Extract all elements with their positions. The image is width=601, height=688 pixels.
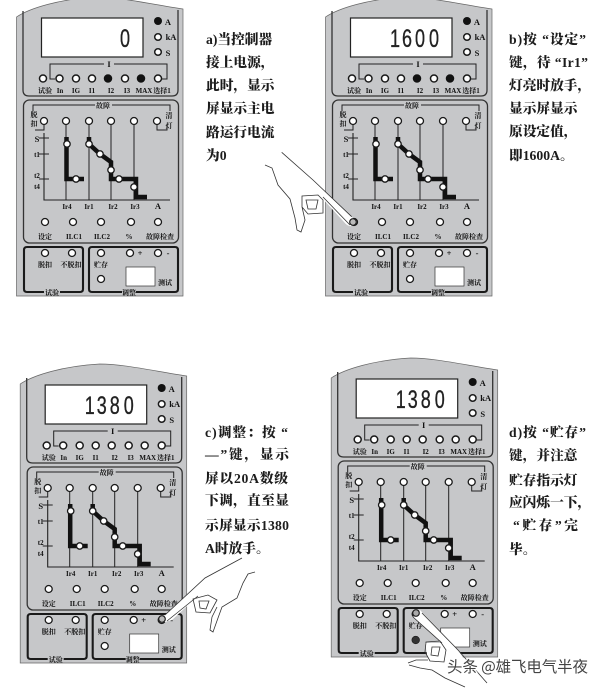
panel labels: A <box>155 201 162 211</box>
panel labels: I1 <box>404 448 410 456</box>
panel labels: 脱扣 <box>353 621 367 630</box>
panel labels: 脱 <box>345 471 352 480</box>
display reading 1600: 0 <box>429 24 439 53</box>
instruction a <box>206 31 276 163</box>
panel d: store setting <box>331 358 498 658</box>
panel labels: I1 <box>89 87 96 95</box>
display reading 1380: 0 <box>435 385 445 414</box>
panel labels: Ir3 <box>439 203 449 211</box>
icon: hand pressing minus key <box>159 558 255 632</box>
panel labels: 脱 <box>30 110 38 119</box>
indicator dots <box>413 74 454 82</box>
panel labels: - <box>167 248 170 258</box>
instruction d <box>509 424 591 557</box>
display reading 1380: 8 <box>110 391 120 420</box>
panel labels: Ir3 <box>445 564 455 572</box>
panel labels: ILC2 <box>403 233 419 241</box>
panel labels: In <box>57 87 63 95</box>
instruction d: “贮存”完 <box>513 517 578 533</box>
panel labels: Ir1 <box>88 570 98 578</box>
panel labels: 试验 <box>347 86 361 95</box>
panel labels: 试验 <box>45 288 59 297</box>
panel labels: ILC1 <box>381 594 397 602</box>
display reading 1380: 3 <box>408 385 418 414</box>
panel labels: t4 <box>38 550 44 558</box>
panel labels: Ir2 <box>423 564 433 572</box>
panel labels: + <box>447 248 452 258</box>
panel labels: I <box>111 426 115 436</box>
panel labels: Ir1 <box>84 203 94 211</box>
panel body <box>326 0 492 296</box>
panel labels: t2 <box>38 539 44 547</box>
instruction c: 下调，直至显 <box>205 492 289 510</box>
panel labels: Ir2 <box>112 570 122 578</box>
instruction b: 即1600A。 <box>509 148 574 163</box>
instruction c: A时放手。 <box>205 540 270 556</box>
panel labels: 调整 <box>126 655 140 664</box>
panel labels: 故障 <box>411 462 425 471</box>
panel labels: 选择1 <box>462 86 480 95</box>
panel labels: S <box>38 501 43 511</box>
panel labels: 清 <box>169 478 176 487</box>
panel labels: 扣 <box>30 119 38 128</box>
panel labels: 试验 <box>353 447 367 456</box>
panel labels: kA <box>169 399 181 409</box>
panel labels: t4 <box>349 544 355 552</box>
instruction c: —”键，显示 <box>204 446 290 464</box>
panel labels: S <box>475 48 480 58</box>
panel labels: % <box>129 600 136 608</box>
panel labels: A <box>165 17 172 27</box>
panel labels: 贮存 <box>94 260 108 269</box>
panel labels: + <box>452 609 457 619</box>
indicator dots <box>104 74 145 82</box>
panel labels: IG <box>381 87 390 95</box>
panel labels: IG <box>387 448 395 456</box>
panel labels: 清 <box>480 472 487 481</box>
panel labels: ILC1 <box>70 600 86 608</box>
panel labels: + <box>138 248 143 258</box>
panel a: controller powered on <box>16 0 183 297</box>
panel labels: 设定 <box>347 232 361 241</box>
panel labels: Ir4 <box>377 564 387 572</box>
panel b: press set key <box>326 0 492 297</box>
panel labels: A <box>159 568 166 578</box>
display reading 1380: 8 <box>421 385 431 414</box>
display reading 1380: 0 <box>124 391 134 420</box>
display reading 1380 <box>396 385 445 414</box>
panel labels: 测试 <box>467 278 481 287</box>
panel labels: I2 <box>112 454 118 462</box>
panel labels: 选择1 <box>153 86 171 95</box>
panel labels: 扣 <box>340 119 346 128</box>
icon: hand pressing set key <box>265 152 356 232</box>
instruction b: 原设定值， <box>509 123 577 141</box>
panel labels: 不脱扣 <box>375 621 396 630</box>
display reading 1380: 1 <box>85 391 95 420</box>
panel labels: 故障检查 <box>461 593 489 602</box>
panel labels: I2 <box>417 87 424 95</box>
panel labels: Ir3 <box>130 203 140 211</box>
panel labels: 故障 <box>96 101 110 110</box>
panel labels: t1 <box>34 151 40 159</box>
instruction b: 显示屏显示 <box>509 100 579 116</box>
panel labels: 设定 <box>38 232 52 241</box>
panel labels: 试验 <box>354 288 368 297</box>
panel labels: Ir3 <box>134 570 144 578</box>
panel labels: 调整 <box>122 288 136 297</box>
panel labels: - <box>170 615 173 625</box>
instruction b <box>508 31 591 163</box>
panel labels: t2 <box>343 172 349 180</box>
panel labels: 选择1 <box>468 447 486 456</box>
panel c: adjust value <box>20 364 187 664</box>
panel labels: 故障 <box>405 101 419 110</box>
panel labels <box>345 378 492 658</box>
display reading 1380: 3 <box>97 391 107 420</box>
instruction a: a)当控制器 <box>206 31 272 48</box>
instruction d: 毕。 <box>509 541 536 557</box>
store indicator lit <box>412 636 419 644</box>
panel labels: % <box>434 233 442 241</box>
panel labels: t1 <box>349 512 355 520</box>
panel labels: 试验 <box>38 86 52 95</box>
instruction c <box>204 424 290 556</box>
panel labels: Ir1 <box>399 564 409 572</box>
panel labels: ILC1 <box>66 233 82 241</box>
panel labels: 调整 <box>437 649 451 658</box>
instruction d: 键，并注意 <box>509 447 579 465</box>
instruction c: c)调整：按 “ <box>205 424 288 441</box>
panel labels: Ir2 <box>417 203 427 211</box>
panel labels: t4 <box>34 183 40 191</box>
panel labels: t2 <box>349 533 355 541</box>
panel labels: % <box>126 233 132 241</box>
panel labels: t2 <box>34 172 40 180</box>
panel labels: 脱扣 <box>42 627 56 636</box>
panel labels: S <box>480 409 485 419</box>
panel labels: ILC2 <box>409 594 425 602</box>
panel labels: A <box>480 378 487 388</box>
panel labels: 脱 <box>34 477 41 486</box>
panel labels: A <box>169 384 176 394</box>
panel labels: 脱扣 <box>38 260 52 269</box>
panel labels: 不脱扣 <box>370 260 390 269</box>
panel labels: S <box>169 415 174 425</box>
display reading 1380 <box>85 391 134 420</box>
panel labels: Ir4 <box>66 570 76 578</box>
panel labels: t1 <box>38 518 44 526</box>
panel labels: I3 <box>439 448 445 456</box>
panel labels: A <box>464 201 471 211</box>
panel labels: 试验 <box>49 655 63 664</box>
panel labels: - <box>481 609 484 619</box>
panel labels: kA <box>480 393 492 403</box>
panel labels: 不脱扣 <box>60 260 82 269</box>
display reading 1600 <box>390 24 439 53</box>
panel labels: I <box>107 59 111 69</box>
instruction c: 示屏显示1380 <box>205 517 289 533</box>
instruction d: 应闪烁一下， <box>509 494 591 512</box>
instruction d: d)按 “贮存” <box>509 424 586 441</box>
panel labels: Ir4 <box>62 203 72 211</box>
panel labels: 试验 <box>360 649 374 658</box>
panel labels: 故障 <box>100 468 114 477</box>
panel labels: 灯 <box>479 482 487 491</box>
panel labels: 测试 <box>162 645 176 654</box>
panel labels: 故障检查 <box>146 232 174 241</box>
panel labels: 灯 <box>168 488 176 497</box>
panel labels: Ir1 <box>393 203 403 211</box>
instruction c: 屏以20A数级 <box>205 470 288 487</box>
panel labels: In <box>366 87 372 95</box>
panel labels: 设定 <box>353 593 367 602</box>
panel labels: 清 <box>474 111 482 120</box>
panel labels: 故障检查 <box>455 232 483 241</box>
panel labels: 不脱扣 <box>64 627 85 636</box>
instruction b: b)按 “设定” <box>509 31 586 48</box>
instruction a: 接上电源， <box>206 54 274 72</box>
panel labels: In <box>371 448 378 456</box>
panel labels: I <box>422 420 426 430</box>
panel labels: 试验 <box>42 453 56 462</box>
panel labels: + <box>141 615 146 625</box>
instruction a: 路运行电流 <box>206 124 276 140</box>
panel labels: 灯 <box>474 121 482 130</box>
panel labels: kA <box>475 32 486 42</box>
instruction d: 贮存指示灯 <box>509 472 578 488</box>
panel labels: In <box>60 454 67 462</box>
panel labels: t4 <box>343 183 349 191</box>
panel labels <box>34 384 181 664</box>
panel labels: I <box>416 59 420 69</box>
panel labels: 扣 <box>345 480 352 489</box>
instruction a: 此时，显示 <box>206 77 276 95</box>
panel labels: MAX <box>445 87 461 95</box>
panel labels: I1 <box>93 454 99 462</box>
panel labels: 脱扣 <box>347 260 361 269</box>
panel labels: ILC1 <box>375 233 391 241</box>
instruction a: 屏显示主电 <box>206 100 275 116</box>
panel labels: 设定 <box>42 599 56 608</box>
panel labels: A <box>470 562 477 572</box>
instruction a: 为0 <box>206 147 227 163</box>
watermark: 头条 @雄飞电气半夜 <box>447 655 588 677</box>
panel labels: MAX <box>136 87 152 95</box>
panel labels: I3 <box>433 87 440 95</box>
display reading 1600: 0 <box>415 24 425 53</box>
panel labels: I3 <box>124 87 131 95</box>
panel labels: 清 <box>166 111 172 120</box>
panel labels: ILC2 <box>94 233 110 241</box>
panel labels: MAX <box>139 454 156 462</box>
panel labels: 故障检查 <box>150 599 178 608</box>
icon: hand pressing store key <box>408 610 487 687</box>
panel labels: S <box>35 134 40 144</box>
instruction b: 灯亮时放手， <box>508 77 591 95</box>
panel labels <box>30 17 177 297</box>
panel labels: A <box>474 17 481 27</box>
display reading 0: 0 <box>120 24 130 53</box>
instruction b: 键，待 “Ir1” <box>509 54 588 72</box>
panel labels: - <box>476 248 479 258</box>
panel labels: 贮存 <box>98 627 112 636</box>
panel labels: S <box>166 48 171 58</box>
panel labels: ILC2 <box>98 600 114 608</box>
panel body <box>331 358 498 657</box>
panel labels: t1 <box>343 151 349 159</box>
panel labels: 脱 <box>340 110 346 119</box>
panel body <box>16 0 183 296</box>
panel labels: 测试 <box>473 639 487 648</box>
panel labels: 选择1 <box>157 453 175 462</box>
panel labels: IG <box>72 87 81 95</box>
panel labels: 测试 <box>158 278 172 287</box>
panel labels: Ir2 <box>108 203 118 211</box>
panel labels <box>340 17 486 297</box>
panel labels: % <box>440 594 447 602</box>
panel labels: I1 <box>398 87 405 95</box>
panel labels: kA <box>166 32 177 42</box>
panel labels: 贮存 <box>403 260 417 269</box>
panel labels: I2 <box>108 87 115 95</box>
panel labels: 贮存 <box>409 621 423 630</box>
panel labels: 扣 <box>34 486 41 495</box>
panel labels: 调整 <box>431 288 445 297</box>
panel labels: I3 <box>128 454 134 462</box>
panel labels: IG <box>76 454 84 462</box>
panel labels: 灯 <box>164 121 172 130</box>
panel labels: MAX <box>450 448 467 456</box>
display reading 1600: 6 <box>402 24 412 53</box>
panel body <box>20 364 187 663</box>
panel labels: S <box>349 495 354 505</box>
display reading 1600: 1 <box>390 24 400 53</box>
panel labels: I2 <box>423 448 429 456</box>
display reading 1380: 1 <box>396 385 406 414</box>
panel labels: S <box>344 134 349 144</box>
panel labels: Ir4 <box>371 203 381 211</box>
